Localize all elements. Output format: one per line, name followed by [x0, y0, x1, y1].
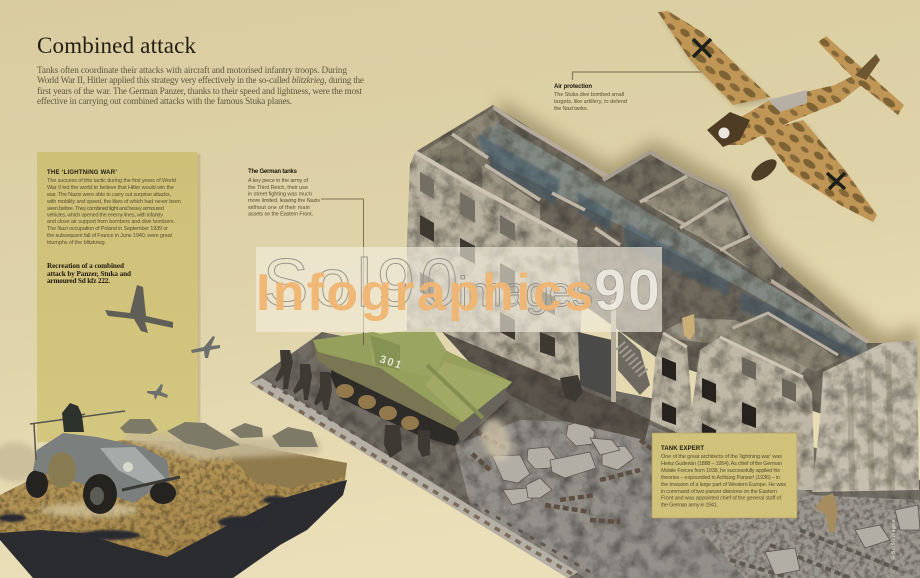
grass: [0, 440, 347, 557]
lightning war text: [46, 170, 181, 246]
front wheel: [83, 474, 117, 514]
muzzle smoke: [476, 415, 516, 465]
armoured car: [26, 403, 180, 514]
body text: the German army in 1941.: [661, 502, 718, 508]
body copy: seen before. They combined light and heavy armoured: [47, 206, 164, 212]
rear track end: [455, 388, 510, 443]
callout: air protection: [554, 72, 702, 112]
aerial frame: [30, 411, 125, 460]
heading: THE ‘LIGHTNING WAR’: [47, 170, 117, 176]
lower facade: [650, 333, 815, 490]
panzer tank with infantry: [313, 328, 516, 465]
body text: Front and was appointed chief of the general staff of: [661, 496, 781, 502]
intro paragraph: [37, 65, 364, 106]
body copy: with mobility and speed, the likes of which had never been: [46, 199, 181, 205]
gun barrel: [427, 365, 483, 418]
floating grass island: [0, 403, 347, 578]
end wall stains: [850, 350, 892, 490]
pale kerb along the front edge: [250, 378, 578, 578]
end wall: [812, 340, 919, 492]
upper left rooms: [418, 108, 540, 222]
tail plane: [818, 36, 904, 115]
building cast shadow: [498, 98, 920, 400]
far wheel: [150, 482, 176, 504]
propeller spinner: [718, 128, 730, 138]
rubble at the foot of the building: [442, 332, 650, 440]
vertical image credit: © Sol90images: [890, 520, 897, 560]
body copy: triumphs of the blitzkrieg.: [47, 240, 106, 246]
track: [330, 362, 466, 446]
small plane: [191, 336, 220, 358]
front glacis: [425, 362, 512, 422]
grey road surface: [455, 420, 920, 578]
far wing: [760, 120, 877, 222]
body text: Heinz Guderian (1888 – 1954). As chief of the German: [661, 461, 782, 467]
callout: the German tanks: the Third Reich, their use: [248, 185, 308, 191]
balkenkreuz markings: [693, 39, 845, 189]
body copy: War II led the world to believe that Hitler would win the: [47, 185, 174, 191]
recreation caption: attack by Panzer, Stuka and: [47, 270, 131, 278]
upper right rooms: [603, 152, 688, 200]
tiny plane: [147, 384, 168, 400]
body copy: the subsequent fall of France in June 1940, were great: [47, 233, 172, 239]
dust at car wheels: [40, 503, 140, 517]
headlight: [123, 462, 133, 472]
title: Combined attack: [37, 33, 196, 58]
body text: Mobile Forces from 1938, he successfully applied his: [661, 468, 780, 474]
plane: Stuka dive bomber: [658, 11, 904, 224]
body copy: The success of this tactic during the first years of World: [47, 178, 176, 184]
recreation caption: armoured Sd kfz 222.: [47, 277, 110, 285]
callout: air protection: The Stuka dive bombed small: [554, 92, 624, 98]
black rock tufts: [0, 496, 287, 540]
small Stuka: [105, 285, 173, 333]
standing column: [611, 300, 616, 402]
intro paragraph: first years of the war. The German Panzer, thanks to their speed and lightness, were the most: [37, 86, 362, 96]
intro paragraph: Tanks often coordinate their attacks with aircraft and motorised infantry troops. During: [37, 65, 347, 75]
left facade: [407, 152, 582, 388]
callout: air protection: targets, like artillery, to defend: [554, 99, 627, 105]
intro paragraph: effective in carrying out combined attacks with the famous Stuka planes.: [37, 96, 292, 106]
heading: TANK EXPERT: [661, 446, 704, 452]
watermark white number: 90: [594, 258, 660, 323]
panel: tank expert: [652, 433, 797, 518]
callout: the German tanks: A key piece in the army of: [248, 178, 308, 184]
lower facade windows: [662, 357, 796, 433]
body text: theories – expounded in Achtung Panzer! (1936) – in: [661, 475, 780, 481]
back wall inner face: [470, 118, 867, 358]
body copy: war. The Nazis were able to carry out surprise attacks,: [46, 192, 171, 198]
callout: the German tanks: more limited, leaving the Nazis: [248, 198, 320, 204]
leader line: [572, 72, 702, 80]
watermark outline text: images: [458, 268, 593, 315]
ground shadow: [335, 380, 512, 445]
callout: air protection: the Nazi tanks.: [554, 106, 588, 112]
recreation caption: Recreation of a combined: [47, 262, 124, 270]
scattered bricks: [465, 425, 660, 522]
soldier on the ruins: [682, 314, 695, 340]
callout: the German tanks: without one of their main: [247, 205, 310, 211]
recreation caption: [47, 262, 131, 285]
infantry soldiers: [275, 350, 583, 458]
plane shadow: [661, 16, 878, 224]
body text: the invasion of a large part of Western Europe. He was: [661, 482, 786, 488]
watermark orange text: Infographics: [256, 264, 593, 322]
bricks along the kerb: [258, 386, 572, 574]
intro paragraph: World War II, Hitler applied this strategy very effectively in the so-called blitzkrieg, during the: [37, 75, 364, 85]
turret number: 301: [378, 353, 403, 372]
body text: One of the great architects of the ‘lightning war’ was: [661, 454, 782, 460]
doorway and stairs: [578, 332, 612, 398]
stone rocks: [492, 421, 920, 575]
body copy: and close air support from bombers and dive bombers.: [47, 219, 175, 225]
leader line: [321, 199, 364, 345]
body text: in command of two panzer divisions on the Eastern: [661, 489, 777, 495]
hull top: [313, 332, 512, 423]
dirt patch: [232, 445, 347, 488]
street diorama ground: [250, 332, 920, 578]
bomb: [748, 155, 780, 185]
engine cowling: [707, 112, 750, 147]
interior floor silhouette: [415, 105, 883, 420]
fuselage: [722, 72, 868, 145]
bumper: [122, 477, 180, 490]
black rock base: [0, 480, 347, 578]
body copy: vehicles, which opened the enemy lines, with infantry: [47, 212, 163, 218]
back wall top edge: [493, 107, 868, 342]
body text: [661, 454, 786, 508]
callout: the German tanks: assets on the Eastern Front.: [248, 212, 313, 218]
spare tyre: [48, 452, 76, 488]
rubble right of the building: [700, 495, 920, 578]
bonnet: [100, 447, 165, 486]
near wing: [658, 11, 770, 105]
watermark outline text: Sol90: [263, 245, 458, 321]
callout: the German tanks: [247, 169, 364, 345]
callout: the German tanks: in street fighting was much: [248, 192, 312, 198]
hull: [33, 433, 170, 503]
body copy: The Nazi occupation of Poland in September 1939 or: [47, 226, 168, 232]
rear wheel: [26, 470, 48, 498]
hull side: [313, 340, 468, 432]
cockpit: [768, 90, 807, 112]
soldier by the expert panel: [815, 493, 838, 532]
turret: [370, 328, 446, 377]
facade roofline: [415, 152, 577, 242]
lower right wall interior: [665, 318, 820, 375]
body copy: [46, 178, 181, 246]
watermark outline text: [263, 245, 593, 321]
callout: air protection: Air protection: [554, 84, 592, 90]
distant tanks: [120, 419, 318, 450]
commander: [62, 403, 84, 432]
ruined building: [407, 105, 919, 492]
callout: the German tanks: The German tanks: [248, 169, 298, 175]
lower facade top edge: [663, 333, 803, 377]
left facade windows: [420, 172, 555, 357]
watermark band: [256, 245, 662, 332]
dust behind tanks: [125, 432, 320, 460]
panel: the lightning war background: [37, 152, 200, 444]
blue paint patches: [480, 135, 860, 358]
dust cloud: [0, 442, 39, 482]
road wheels: [336, 384, 419, 430]
